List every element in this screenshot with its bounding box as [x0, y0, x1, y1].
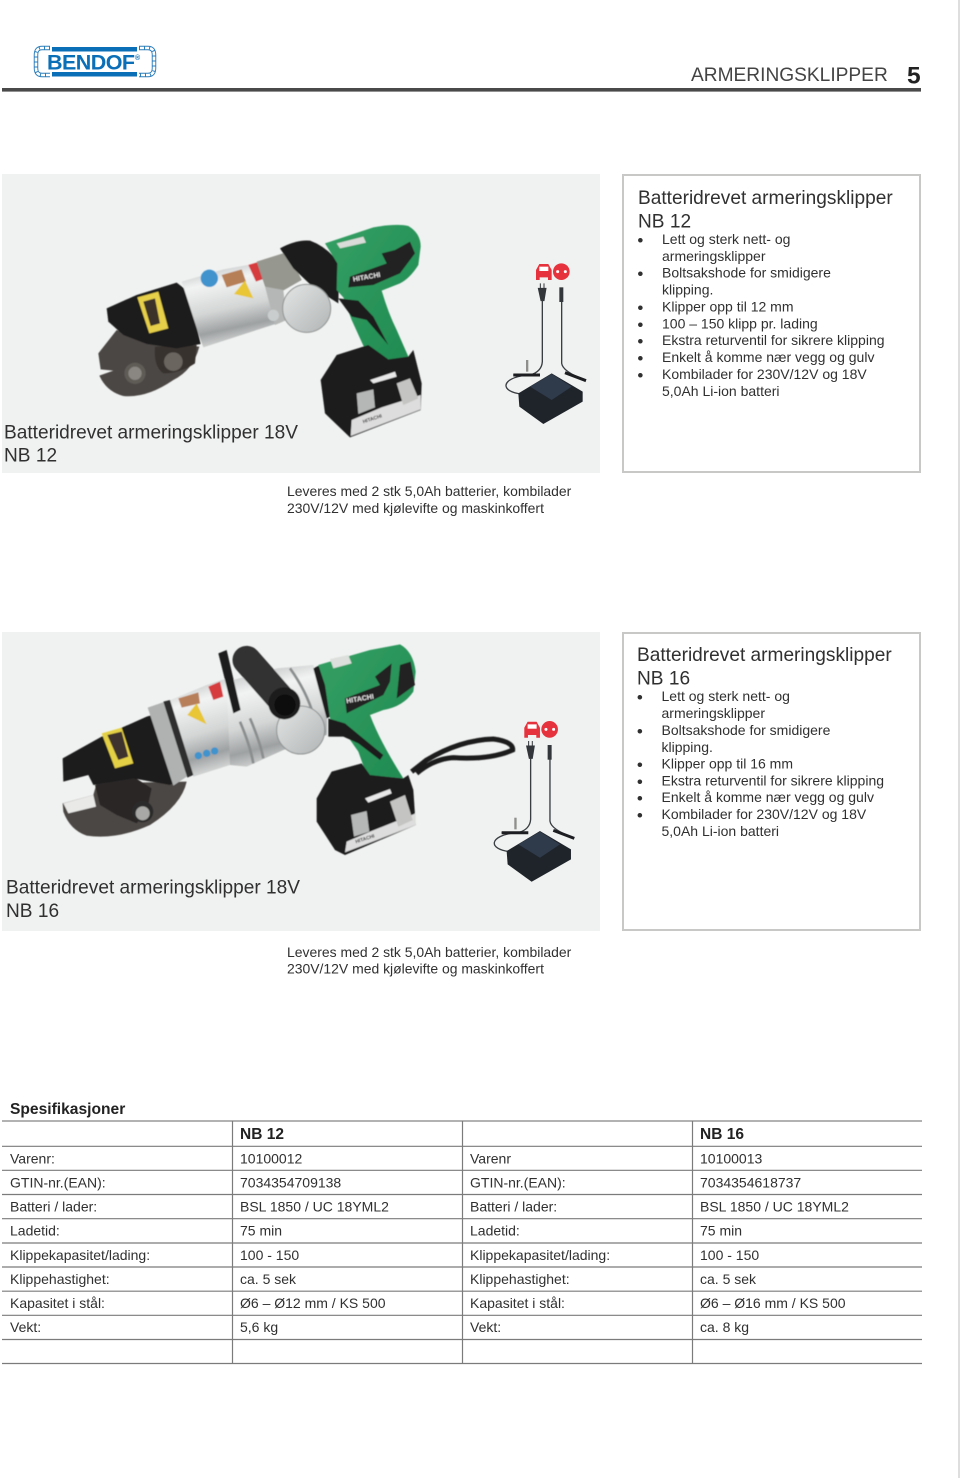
- bullet list: Boltsakshode for smidigere: [662, 265, 831, 281]
- column: NB 16 values: BSL 1850 / UC 18YML2: [700, 1198, 849, 1214]
- column: NB 16 labels: Klippekapasitet/lading:: [470, 1247, 610, 1263]
- bullet list: •: [637, 772, 643, 791]
- bullet list: [637, 231, 885, 399]
- heading: NB 12: [638, 211, 691, 232]
- logo: Bendof: BENDOF: [47, 50, 135, 74]
- column: NB 16 labels: Ladetid:: [470, 1222, 520, 1238]
- column: NB 12 values: 5,6 kg: [240, 1319, 278, 1335]
- heading: NB 16: [637, 668, 690, 689]
- column: NB 16 values: Ø6 – Ø16 mm / KS 500: [700, 1295, 846, 1311]
- bullet list: •: [637, 299, 643, 318]
- delivery note NB 16: Leveres med 2 stk 5,0Ah batterier, kombilader: [287, 944, 572, 960]
- heading: Batteridrevet armeringsklipper: [638, 188, 893, 209]
- panel: product image NB 12: [2, 174, 600, 473]
- table column heads: NB 12: [240, 1126, 284, 1143]
- panel: features NB 12: [623, 175, 920, 472]
- bullet list: •: [637, 722, 643, 741]
- column: NB 12 values: 100 - 150: [240, 1247, 299, 1263]
- panel: features NB 16: [623, 633, 920, 930]
- column: NB 12 labels: Vekt:: [10, 1319, 41, 1335]
- bullet list: Klipper opp til 12 mm: [662, 299, 794, 315]
- bullet list: •: [637, 265, 643, 284]
- bullet list: •: [637, 231, 643, 250]
- illustration: charger NB 12: [506, 263, 586, 424]
- heading: Batteridrevet armeringsklipper: [637, 645, 892, 666]
- delivery note NB 12: [287, 483, 572, 516]
- column: NB 12 values: 7034354709138: [240, 1174, 341, 1190]
- bullet list: •: [637, 688, 643, 707]
- column: NB 12 labels: Klippehastighet:: [10, 1271, 110, 1287]
- specifications table: [2, 1121, 922, 1364]
- column: NB 16 labels: GTIN-nr.(EAN):: [470, 1174, 566, 1190]
- bullet list: •: [637, 366, 643, 385]
- illustration: tool NB 12: [98, 225, 422, 437]
- column: NB 16 values: [700, 1150, 849, 1335]
- column: NB 12 values: ca. 5 sek: [240, 1271, 297, 1287]
- table column heads: [240, 1126, 744, 1143]
- page number: 5: [907, 62, 921, 90]
- delivery note NB 16: [287, 944, 572, 977]
- bullet list: •: [637, 806, 643, 825]
- bullet list: Enkelt å komme nær vegg og gulv: [662, 789, 874, 805]
- bullet list: Enkelt å komme nær vegg og gulv: [662, 349, 874, 365]
- logo: Bendof: ®: [135, 54, 141, 62]
- table column heads: NB 16: [700, 1126, 744, 1143]
- illustration: tool NB 16: HITACHI: [355, 833, 376, 845]
- bullet list: armeringsklipper: [662, 248, 766, 264]
- column: NB 12 values: [240, 1150, 389, 1335]
- bullet list: klipping.: [662, 282, 713, 298]
- column: NB 16 labels: [470, 1150, 610, 1335]
- delivery note NB 16: 230V/12V med kjølevifte og maskinkoffert: [287, 961, 544, 977]
- column: NB 12 values: 10100012: [240, 1150, 303, 1166]
- bullet list: Lett og sterk nett- og: [662, 688, 790, 704]
- product name NB 12: [4, 422, 298, 466]
- column: NB 12 labels: Kapasitet i stål:: [10, 1295, 105, 1311]
- bullet list: [637, 688, 884, 839]
- bullet list: Ekstra returventil for sikrere klipping: [662, 332, 885, 348]
- bullet list: Ekstra returventil for sikrere klipping: [662, 772, 884, 788]
- column: NB 16 labels: Kapasitet i stål:: [470, 1295, 565, 1311]
- delivery note NB 12: Leveres med 2 stk 5,0Ah batterier, kombilader: [287, 483, 572, 499]
- column: NB 12 labels: Klippekapasitet/lading:: [10, 1247, 150, 1263]
- bullet list: •: [637, 316, 643, 334]
- bullet list: klipping.: [662, 739, 713, 755]
- column: NB 16 values: ca. 8 kg: [700, 1319, 749, 1335]
- panel: product image NB 16: [2, 632, 600, 931]
- column: NB 16 values: ca. 5 sek: [700, 1271, 757, 1287]
- header title: ARMERINGSKLIPPER: [691, 65, 888, 86]
- logo: Bendof: [36, 47, 154, 76]
- column: NB 12 values: 75 min: [240, 1222, 282, 1238]
- column: NB 16 labels: Batteri / lader:: [470, 1198, 557, 1214]
- bullet list: •: [637, 332, 643, 351]
- column: NB 12 labels: Batteri / lader:: [10, 1198, 97, 1214]
- heading: [637, 645, 892, 689]
- bullet list: •: [637, 349, 643, 368]
- bullet list: Lett og sterk nett- og: [662, 231, 790, 247]
- column: NB 16 values: 10100013: [700, 1150, 763, 1166]
- product name NB 16: Batteridrevet armeringsklipper 18V: [6, 878, 300, 898]
- bullet list: •: [637, 756, 643, 775]
- bullet list: Kombilader for 230V/12V og 18V: [662, 806, 867, 822]
- product name NB 16: NB 16: [6, 901, 59, 922]
- product name NB 12: NB 12: [4, 446, 57, 466]
- delivery note NB 12: 230V/12V med kjølevifte og maskinkoffert: [287, 500, 544, 516]
- column: NB 12 labels: GTIN-nr.(EAN):: [10, 1174, 106, 1190]
- column: NB 16 values: 7034354618737: [700, 1174, 801, 1190]
- illustration: tool NB 12: HITACHI: [362, 413, 383, 425]
- column: NB 16 labels: Varenr: [470, 1150, 511, 1166]
- illustration: tool NB 12: HITACHI: [352, 272, 381, 284]
- column: NB 16 labels: Klippehastighet:: [470, 1271, 570, 1287]
- bullet list: •: [637, 789, 643, 808]
- bullet list: 100 – 150 klipp pr. lading: [662, 316, 818, 332]
- column: NB 12 values: Ø6 – Ø12 mm / KS 500: [240, 1295, 386, 1311]
- column: NB 16 labels: Vekt:: [470, 1319, 501, 1335]
- column: NB 16 values: 75 min: [700, 1222, 742, 1238]
- product name NB 12: Batteridrevet armeringsklipper 18V: [4, 422, 298, 444]
- illustration: charger NB 16: [494, 721, 574, 882]
- column: NB 16 values: 100 - 150: [700, 1247, 759, 1263]
- bullet list: armeringsklipper: [662, 705, 765, 721]
- product name NB 16: [6, 878, 300, 922]
- bullet list: Boltsakshode for smidigere: [662, 722, 831, 738]
- bullet list: Klipper opp til 16 mm: [662, 756, 793, 772]
- bullet list: 5,0Ah Li-ion batteri: [662, 823, 779, 839]
- bullet list: Kombilader for 230V/12V og 18V: [662, 366, 867, 382]
- column: NB 12 labels: [10, 1150, 150, 1335]
- heading: [638, 188, 893, 232]
- column: NB 12 labels: Ladetid:: [10, 1222, 60, 1238]
- specifications heading: Spesifikasjoner: [10, 1101, 125, 1118]
- column: NB 12 labels: Varenr:: [10, 1150, 55, 1166]
- illustration: tool NB 16: HITACHI: [346, 694, 374, 705]
- column: NB 12 values: BSL 1850 / UC 18YML2: [240, 1198, 389, 1214]
- bullet list: 5,0Ah Li-ion batteri: [662, 383, 780, 399]
- illustration: tool NB 16: [63, 644, 513, 855]
